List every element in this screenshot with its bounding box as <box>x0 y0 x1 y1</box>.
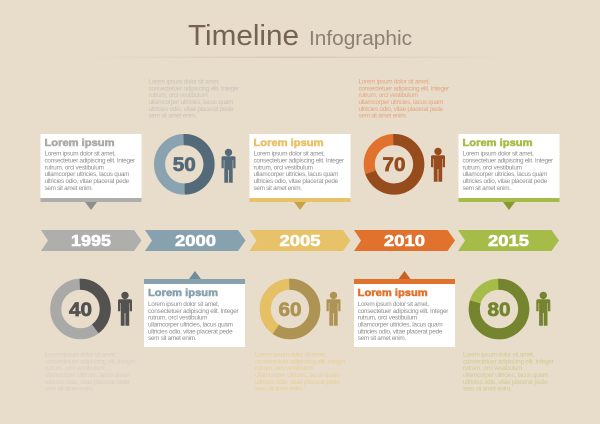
panel: card 2005: rutrum, orci vestibulum <box>254 164 313 171</box>
panel: card 2000: consectetuer adipiscing elit. Integer <box>148 308 240 315</box>
panel: card 2015: Lorem ipsum <box>462 138 532 149</box>
text block: 50 top: consectetuer adipiscing elit. Integer <box>148 85 240 92</box>
text block: 40 bottom <box>45 352 137 393</box>
panel: card 2000: ultricies odio, vitae placerat pede <box>148 328 233 335</box>
title: Timeline <box>188 20 299 52</box>
text block: 60 bottom: sem sit amet enim. <box>255 386 304 393</box>
donut chart: 80: 80 <box>488 300 510 321</box>
panel: card 2015: sem sit amet enim. <box>462 185 511 192</box>
text block: 60 bottom: rutrum, orci vestibulum <box>255 365 314 372</box>
text block: 70 top: ultricies odio, vitae placerat pede <box>358 106 444 113</box>
timeline arrow: 2015: 2015 <box>488 233 529 250</box>
timeline arrow: 1995: 1995 <box>71 233 111 250</box>
text block: 80 bottom: Lorem ipsum dolor sit amet, <box>463 352 535 358</box>
panel: card 2010: ultricies odio, vitae placerat pede <box>358 328 443 335</box>
panel: card 2010: consectetuer adipiscing elit. Integer <box>358 308 449 315</box>
panel: card 2005: ultricies odio, vitae placerat pede <box>254 178 339 185</box>
text block: 60 bottom: Lorem ipsum dolor sit amet, <box>255 352 327 358</box>
title: Infographic <box>309 27 412 50</box>
panel: card 1995 <box>40 134 142 210</box>
icon: person 60 <box>326 292 340 326</box>
panel: card 2010: ullamcorper ultricies, lacus quam <box>358 321 443 328</box>
panel: card 2010: sem sit amet enim. <box>358 335 406 342</box>
timeline arrow: 2015 <box>458 230 559 251</box>
timeline arrow: 2005 <box>250 230 350 251</box>
text block: 80 bottom: rutrum, orci vestibulum <box>463 365 522 372</box>
donut chart: 70 <box>369 140 419 189</box>
panel: card 2010: rutrum, orci vestibulum <box>358 315 417 322</box>
panel: card 2005 <box>250 134 350 210</box>
donut chart: 60 <box>265 284 315 334</box>
icon: person 40 <box>118 292 132 326</box>
text block: 70 top: Lorem ipsum dolor sit amet, <box>358 78 430 86</box>
donut chart: 40: 40 <box>69 300 92 321</box>
text block: 40 bottom: Lorem ipsum dolor sit amet, <box>45 352 117 358</box>
timeline arrow: 2000 <box>145 230 246 251</box>
panel: card 2005: Lorem ipsum dolor sit amet, <box>254 151 325 158</box>
donut chart: 70: 70 <box>382 155 406 176</box>
text block: 70 top: consectetuer adipiscing elit. Integer <box>358 85 450 92</box>
text block: 80 bottom: consectetuer adipiscing elit. Integer <box>463 358 555 365</box>
panel: card 2010 <box>354 271 455 347</box>
text block: 40 bottom: consectetuer adipiscing elit. Integer <box>45 358 137 365</box>
text block: 70 top: sem sit amet enim. <box>358 113 407 120</box>
panel: card 1995: sem sit amet enim. <box>44 185 93 192</box>
icon: person 70 <box>431 148 445 182</box>
panel: card 1995: consectetuer adipiscing elit. Integer <box>44 158 136 165</box>
text block: 40 bottom: ultricies odio, vitae placerat pede <box>45 379 130 386</box>
panel: card 1995: ullamcorper ultricies, lacus quam <box>44 171 130 178</box>
text block: 50 top: Lorem ipsum dolor sit amet, <box>148 78 220 86</box>
panel: card 2000: Lorem ipsum <box>148 288 218 299</box>
icon: person 50 <box>222 149 236 183</box>
panel: card 2010: Lorem ipsum <box>358 288 428 299</box>
panel: card 1995: rutrum, orci vestibulum <box>44 164 104 171</box>
text block: 70 top: ullamcorper ultricies, lacus quam <box>358 99 444 106</box>
panel: card 2000: rutrum, orci vestibulum <box>148 315 208 322</box>
text block: 50 top: rutrum, orci vestibulum <box>148 92 208 99</box>
donut chart: 40 <box>56 284 105 334</box>
panel: card 2015 <box>458 134 560 210</box>
text block: 70 top <box>358 78 450 120</box>
text block: 60 bottom: ultricies odio, vitae placerat pede <box>255 379 340 386</box>
text block: 50 top: ultricies odio, vitae placerat pede <box>148 106 234 113</box>
text block: 40 bottom: ullamcorper ultricies, lacus quam <box>45 372 130 379</box>
panel: card 2005: sem sit amet enim. <box>254 185 302 192</box>
timeline arrow: 1995 <box>41 230 142 251</box>
panel: card 2015: consectetuer adipiscing elit. Integer <box>462 158 554 165</box>
text block: 80 bottom: sem sit amet enim. <box>463 386 512 393</box>
panel: card 2015: ultricies odio, vitae placerat pede <box>462 178 548 185</box>
panel: card 2000 <box>144 271 245 347</box>
panel: card 2015: Lorem ipsum dolor sit amet, <box>462 151 534 158</box>
text block: 60 bottom: ullamcorper ultricies, lacus quam <box>255 372 340 379</box>
panel: card 2000: sem sit amet enim. <box>148 335 197 342</box>
text block: 60 bottom: consectetuer adipiscing elit. Integer <box>255 358 347 365</box>
panel: card 1995: ultricies odio, vitae placerat pede <box>44 178 130 185</box>
timeline arrow: 2010 <box>354 230 455 251</box>
panel: card 2010: Lorem ipsum dolor sit amet, <box>358 301 429 308</box>
text block: 50 top: ullamcorper ultricies, lacus quam <box>148 99 234 106</box>
timeline arrow: 2010: 2010 <box>384 233 425 250</box>
text block: 80 bottom: ultricies odio, vitae placerat pede <box>463 379 548 386</box>
panel: card 1995: Lorem ipsum dolor sit amet, <box>44 151 116 158</box>
panel: card 2000: Lorem ipsum dolor sit amet, <box>148 301 220 308</box>
text block: 80 bottom <box>463 352 555 393</box>
text block: 60 bottom <box>255 352 347 393</box>
panel: card 2015: rutrum, orci vestibulum <box>462 164 522 171</box>
donut chart: 50: 50 <box>173 155 196 176</box>
panel: card 2005: consectetuer adipiscing elit. Integer <box>254 158 345 165</box>
panel: card 2000: ullamcorper ultricies, lacus quam <box>148 321 233 328</box>
text block: 70 top: rutrum, orci vestibulum <box>358 92 418 99</box>
text block: 40 bottom: sem sit amet enim. <box>45 386 94 393</box>
panel: card 2005: Lorem ipsum <box>254 138 324 149</box>
panel: card 2015: ullamcorper ultricies, lacus quam <box>462 171 548 178</box>
timeline arrow: 2005: 2005 <box>280 233 321 250</box>
donut chart: 80 <box>474 284 524 334</box>
text block: 50 top: sem sit amet enim. <box>148 113 197 120</box>
panel: card 1995: Lorem ipsum <box>44 138 114 149</box>
donut chart: 60: 60 <box>278 300 302 321</box>
text block: 50 top <box>148 78 240 120</box>
icon: person 80 <box>536 292 550 326</box>
title <box>188 20 412 52</box>
panel: card 2005: ullamcorper ultricies, lacus quam <box>254 171 338 178</box>
timeline arrow: 2000: 2000 <box>175 233 216 250</box>
text block: 80 bottom: ullamcorper ultricies, lacus quam <box>463 372 548 379</box>
donut chart: 50 <box>160 140 209 189</box>
text block: 40 bottom: rutrum, orci vestibulum <box>45 365 104 372</box>
